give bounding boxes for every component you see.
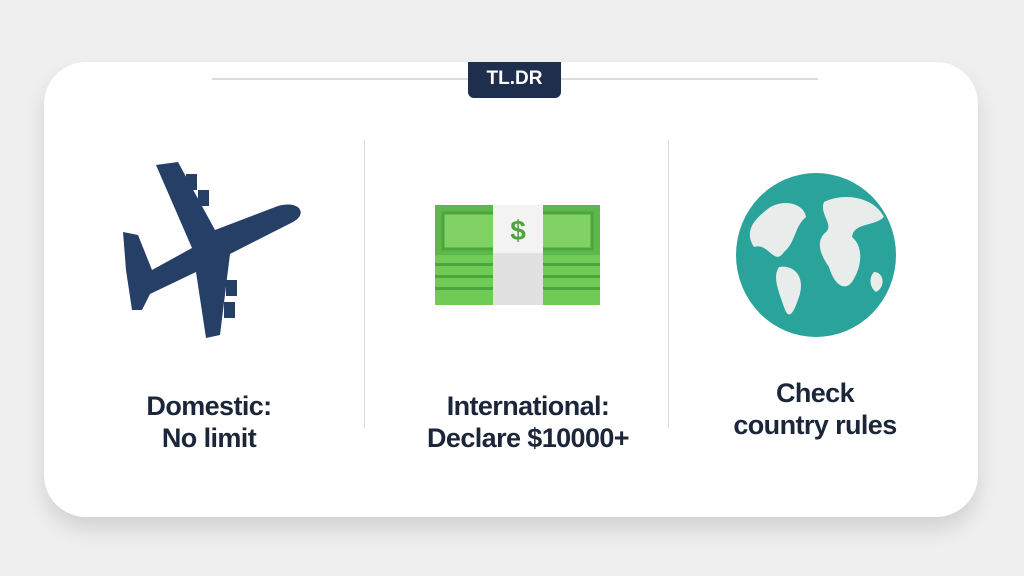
icon: money stack: $: [510, 215, 526, 246]
badge: TL.DR: TL.DR: [487, 68, 542, 89]
text: international: Declare $10000+: [427, 423, 629, 453]
icon: money stack: [435, 205, 600, 305]
text: domestic: [146, 391, 272, 453]
panel: card: [44, 62, 978, 517]
text: domestic: No limit: [162, 423, 256, 453]
text: international: International:: [447, 391, 609, 421]
icon: airplane: [123, 162, 301, 338]
text: check country rules: [733, 378, 897, 440]
text: domestic: Domestic:: [146, 391, 272, 421]
text: international: [427, 391, 629, 453]
text: check country rules: country rules: [733, 410, 897, 440]
badge: TL.DR: [468, 62, 561, 98]
icon: globe: [736, 173, 896, 337]
text: check country rules: Check: [776, 378, 854, 408]
